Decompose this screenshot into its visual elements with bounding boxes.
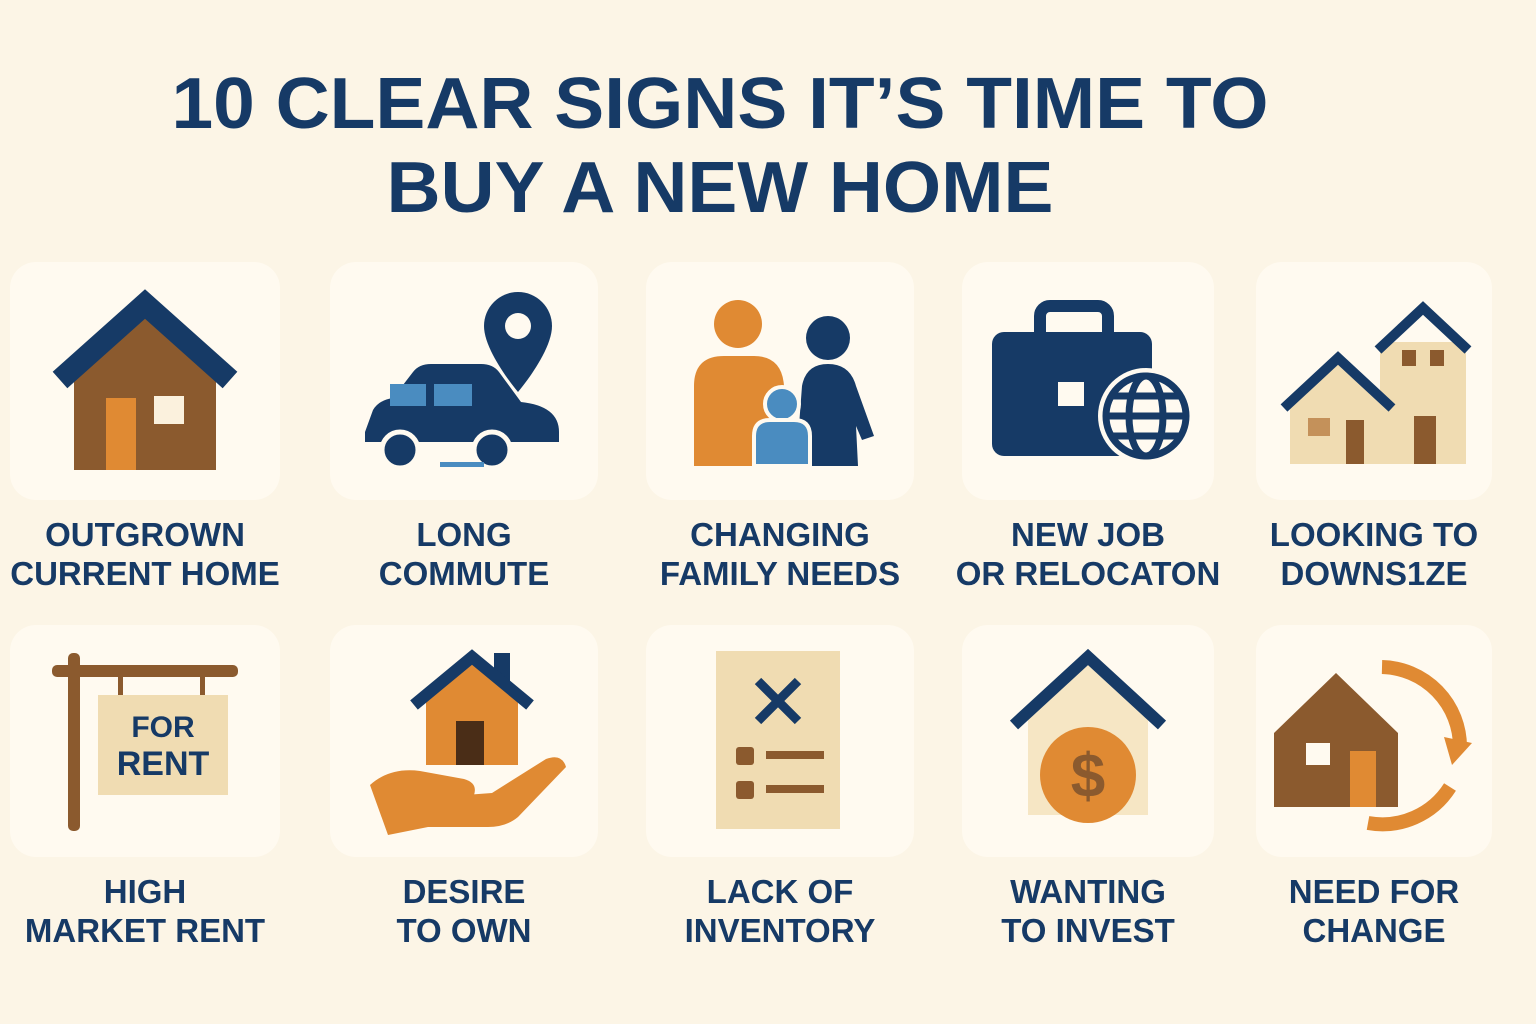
icon: for rent sign <box>52 653 238 831</box>
label: downsize: DOWNS1ZE <box>1280 555 1468 592</box>
label: outgrown: OUTGROWN <box>45 516 245 553</box>
icon: briefcase and globe <box>992 300 1190 460</box>
label: outgrown: CURRENT HOME <box>10 555 280 592</box>
label: long commute <box>379 516 549 592</box>
icon: house with arrows <box>1274 660 1472 832</box>
icon: house with dollar: $ <box>1071 742 1105 811</box>
icon: two houses <box>1280 301 1472 464</box>
title: BUY A NEW HOME <box>386 148 1053 228</box>
label: desire to own: TO OWN <box>396 912 532 949</box>
label: high rent: MARKET RENT <box>25 912 265 949</box>
panel: outgrown current home <box>10 262 280 500</box>
panel: downsize <box>1256 262 1492 500</box>
label: family <box>660 516 900 592</box>
icon: for rent sign: RENT <box>117 745 210 783</box>
label: outgrown <box>10 516 280 592</box>
title <box>171 64 1269 228</box>
icon: for rent sign: FOR <box>131 711 195 744</box>
label: downsize: LOOKING TO <box>1270 516 1478 553</box>
label: new job: NEW JOB <box>1011 516 1165 553</box>
icon: house in hand <box>370 649 566 835</box>
label: invest: WANTING <box>1010 873 1166 910</box>
icon: house <box>52 289 238 470</box>
label: family: CHANGING <box>690 516 870 553</box>
panel: need for change <box>1256 625 1492 857</box>
label: change: CHANGE <box>1302 912 1446 949</box>
label: inventory: LACK OF <box>707 873 853 910</box>
label: high rent: HIGH <box>104 873 186 910</box>
label: change: NEED FOR <box>1289 873 1459 910</box>
icon: house with dollar <box>1010 649 1166 823</box>
label: inventory: INVENTORY <box>685 912 875 949</box>
icon: checklist with X <box>716 651 840 829</box>
label: new job <box>956 516 1220 592</box>
panel: desire to own <box>330 625 598 857</box>
label: family: FAMILY NEEDS <box>660 555 900 592</box>
label: desire to own <box>396 873 532 949</box>
label: downsize <box>1270 516 1478 592</box>
label: high rent <box>25 873 265 949</box>
panel: long commute <box>330 262 598 500</box>
label: long commute: COMMUTE <box>379 555 549 592</box>
label: inventory <box>685 873 875 949</box>
panel: high market rent <box>10 625 280 857</box>
panel: lack of inventory <box>646 625 914 857</box>
label: change <box>1289 873 1459 949</box>
icon: car and pin <box>365 292 559 467</box>
label: new job: OR RELOCATON <box>956 555 1220 592</box>
label: invest <box>1001 873 1175 949</box>
label: invest: TO INVEST <box>1001 912 1175 949</box>
title: 10 CLEAR SIGNS IT’S TIME TO <box>171 64 1269 144</box>
panel: wanting to invest <box>962 625 1214 857</box>
label: desire to own: DESIRE <box>403 873 525 910</box>
panel: changing family needs <box>646 262 914 500</box>
icon: family <box>694 300 874 466</box>
panel: new job <box>962 262 1214 500</box>
label: long commute: LONG <box>416 516 512 553</box>
